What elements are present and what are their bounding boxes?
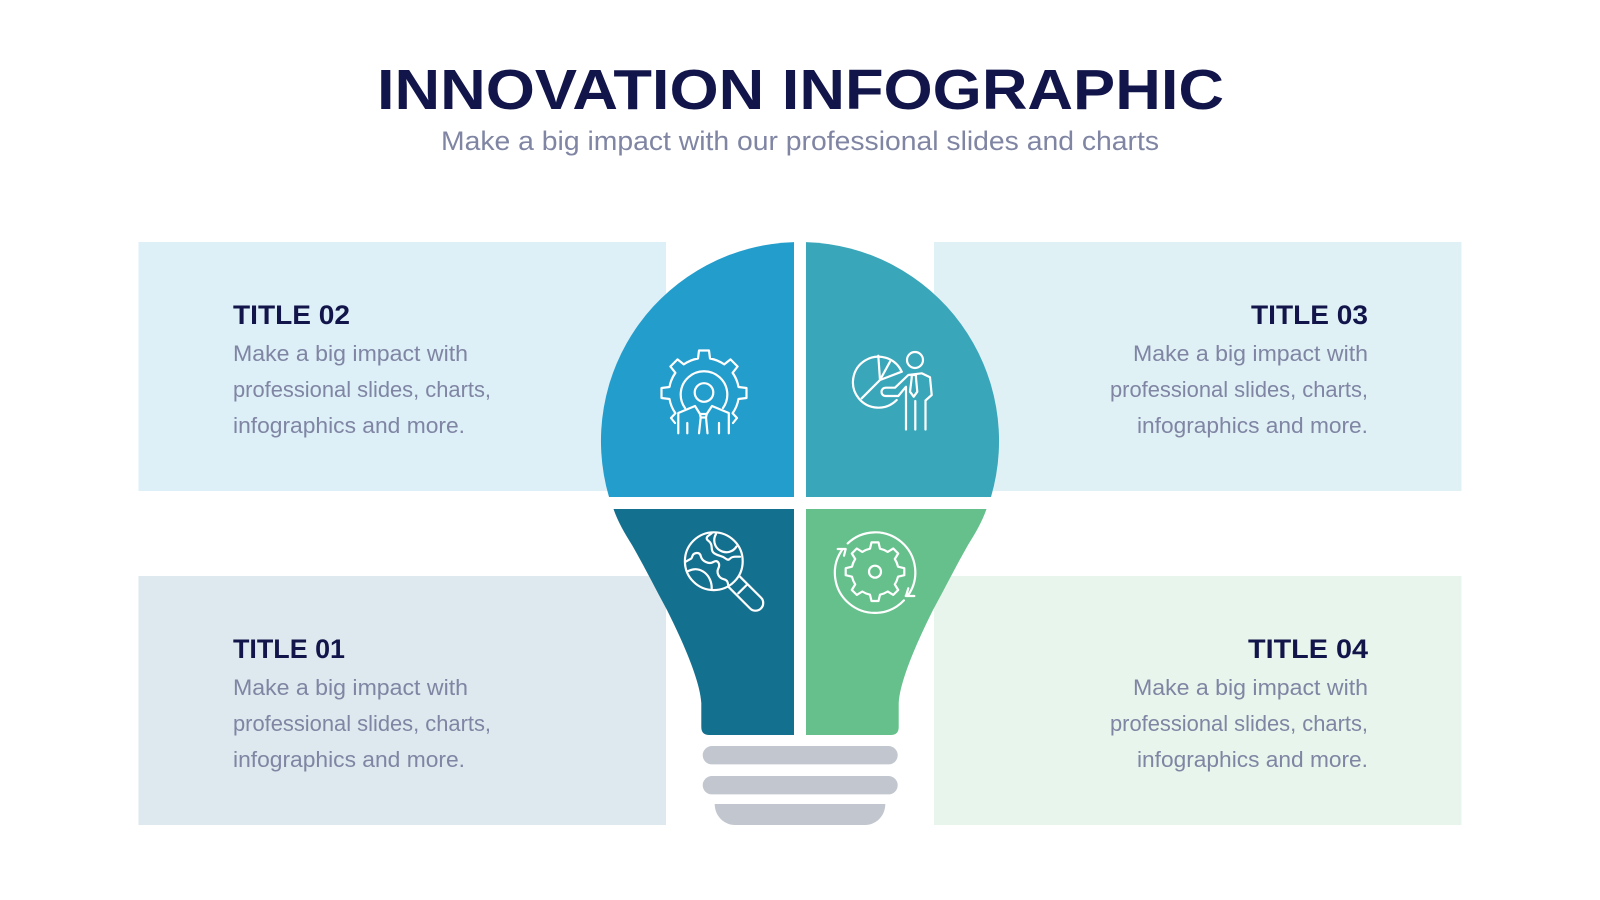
- heading: title 04: TITLE 04: [1248, 634, 1368, 664]
- text block: title 01: [233, 675, 491, 772]
- text block: title 02: [233, 341, 491, 438]
- bulb quadrant: top left: [601, 242, 794, 497]
- icon: globe under magnifier: [685, 532, 763, 611]
- text block: title 04: infographics and more.: [1137, 747, 1368, 772]
- heading: title 01: TITLE 01: [233, 634, 345, 664]
- icon: gear with rotating arrows: [835, 532, 915, 613]
- bulb quadrant: top right: [806, 242, 999, 497]
- heading: title 03: TITLE 03: [1251, 300, 1368, 330]
- text block: title 04: [1110, 675, 1368, 772]
- panel: title 02: [138, 242, 666, 491]
- text block: title 02: Make a big impact with: [233, 341, 468, 366]
- text block: title 04: professional slides, charts,: [1110, 711, 1368, 736]
- text block: title 03: [1110, 341, 1368, 438]
- text block: title 03: Make a big impact with: [1133, 341, 1368, 366]
- text block: title 03: professional slides, charts,: [1110, 377, 1368, 402]
- subtitle: Make a big impact with our professional slides and charts: [441, 126, 1159, 156]
- light bulb: [601, 242, 999, 825]
- bulb quadrant: bottom left: [614, 509, 794, 735]
- title: INNOVATION INFOGRAPHIC: [377, 58, 1224, 122]
- panel: title 04: [934, 576, 1462, 825]
- panel: title 03: [934, 242, 1462, 491]
- text block: title 04: Make a big impact with: [1133, 675, 1368, 700]
- text block: title 01: Make a big impact with: [233, 675, 468, 700]
- text block: title 01: professional slides, charts,: [233, 711, 491, 736]
- heading: title 02: TITLE 02: [233, 300, 350, 330]
- text block: title 01: infographics and more.: [233, 747, 465, 772]
- icon: gear with person: [662, 350, 746, 433]
- bulb base: [703, 746, 898, 825]
- text block: title 02: professional slides, charts,: [233, 377, 491, 402]
- text block: title 03: infographics and more.: [1137, 413, 1368, 438]
- icon: presenter with pie chart: [853, 352, 932, 430]
- panel: title 01: [138, 576, 666, 825]
- text block: title 02: infographics and more.: [233, 413, 465, 438]
- bulb quadrant: bottom right: [806, 509, 986, 735]
